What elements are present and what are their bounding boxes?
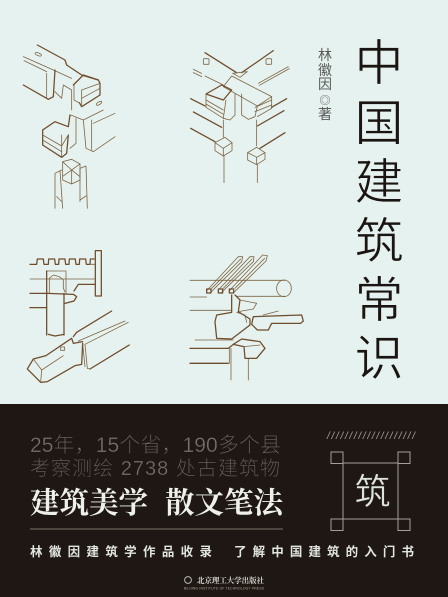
title: 中国建筑常识: 国 <box>354 97 404 151</box>
author: 林徽因◎著: 林 <box>318 47 332 63</box>
subtitle line <box>30 544 414 559</box>
title: 中国建筑常识: 中 <box>354 37 404 91</box>
publisher logo and name: 北京理工大学出版社 <box>197 575 264 585</box>
title: 中国建筑常识 <box>354 37 404 386</box>
title: 中国建筑常识: 识 <box>354 332 404 386</box>
author: 林徽因◎著: 著 <box>318 106 332 122</box>
slogan: 建筑美学 散文笔法: 建筑美学 <box>30 487 148 520</box>
slogan: 建筑美学 散文笔法: 散文笔法 <box>165 487 286 520</box>
stat text lines <box>30 434 281 480</box>
author: 林徽因◎著 <box>318 47 332 122</box>
publisher logo and name: BEIJING INSTITUTE OF TECHNOLOGY PRESS <box>184 586 265 590</box>
illustration: bracket joint with column <box>23 45 115 208</box>
subtitle line: 了解中国建筑的入门书 <box>234 544 414 559</box>
title: 中国建筑常识: 建 <box>354 156 404 210</box>
author: 林徽因◎著: 因 <box>318 76 332 92</box>
title: 中国建筑常识: 常 <box>354 274 404 328</box>
emblem: 筑 in frame: 筑 <box>354 471 391 512</box>
stat text lines: 考察测绘 2738 处古建筑物 <box>30 457 280 480</box>
title: 中国建筑常识: 筑 <box>354 215 404 269</box>
emblem: 筑 in frame <box>326 431 416 530</box>
stat text lines: 25年，15个省，190多个县 <box>30 434 281 457</box>
illustration: dougong plan and cantilever <box>27 251 129 382</box>
illustration: corner bracket joint <box>191 51 289 183</box>
emblem: 筑 in frame: //////////////////// <box>326 431 416 442</box>
author: 林徽因◎著: ◎ <box>320 94 330 107</box>
illustration: rafters and beam joint <box>190 255 303 380</box>
subtitle line: 林徽因建筑学作品收录 <box>30 544 212 559</box>
dark bottom band <box>0 404 448 597</box>
divider rule <box>30 528 283 530</box>
publisher logo and name <box>184 575 265 590</box>
author: 林徽因◎著: 徽 <box>318 62 332 78</box>
